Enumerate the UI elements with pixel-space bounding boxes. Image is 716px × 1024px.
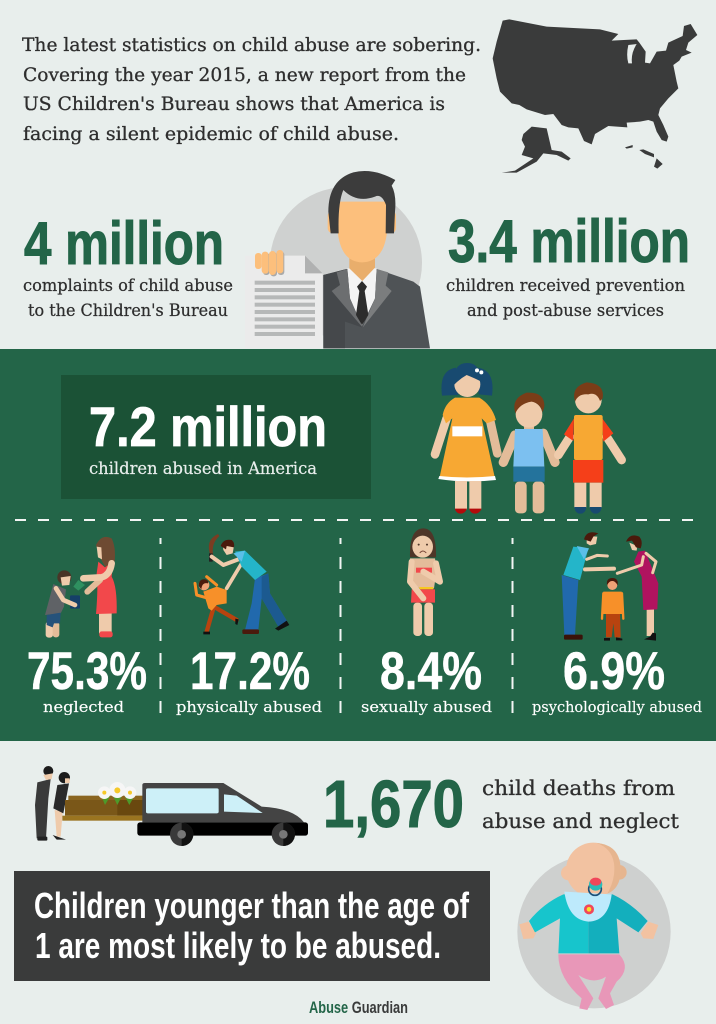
illustration: mourners, coffin and hearse [35,766,308,846]
panel: green statistics band [0,349,716,741]
stat: 1,670 child deaths [323,767,680,842]
illustration: psychologically abused child with arguing parents [562,532,658,641]
stat: 4 million: to the Children's Bureau [28,301,228,320]
stat: 4 million: 4 million [24,210,224,277]
stat: 1,670 child deaths: 1,670 [323,767,464,842]
stat: 4 million: complaints of child abuse [23,276,233,295]
intro text block: The latest statistics on child abuse are sobering. [22,35,481,56]
callout: 7.2 million children abused: 7.2 million [89,395,327,458]
stat: 17.2% physically abused: physically abused [176,700,322,716]
illustration: neglected child with mother [45,537,117,638]
stat: 17.2% physically abused: 17.2% [190,642,310,701]
intro text block [22,35,481,145]
stat: 8.4% sexually abused [361,642,492,716]
illustration: man holding a report [245,171,430,348]
stat: 3.4 million: children received prevention [446,276,685,295]
stat: 4 million [23,210,233,320]
stat: 75.3% neglected [27,642,147,716]
intro text block: US Children's Bureau shows that America is [23,94,445,115]
stat: 8.4% sexually abused: 8.4% [380,642,482,701]
illustration: baby with pacifier [517,843,671,1010]
stat: 1,670 child deaths: abuse and neglect [482,809,680,833]
callout: youngest children most at risk: Children younger than the age of [34,885,470,926]
stat: 75.3% neglected: neglected [43,700,124,716]
stat: 6.9% psychologically abused: 6.9% [563,642,665,701]
stat: 1,670 child deaths: child deaths from [482,776,675,800]
stat: 8.4% sexually abused: sexually abused [361,700,492,716]
callout: youngest children most at risk [14,871,490,981]
intro text block: facing a silent epidemic of child abuse. [23,124,399,145]
stat: 3.4 million: and post-abuse services [467,301,664,320]
callout: 7.2 million children abused: children abused in America [89,459,317,479]
stat: 6.9% psychologically abused: psychologically abused [532,700,702,716]
stat: 17.2% physically abused [176,642,322,716]
stat: 6.9% psychologically abused [532,642,702,716]
icon: US map [493,19,697,173]
footer logo: Abuse Guardian: Abuse Guardian [309,998,408,1017]
callout: 7.2 million children abused [61,375,371,499]
illustration: three children holding hands [435,363,622,514]
callout: youngest children most at risk: 1 are most likely to be abused. [35,925,441,966]
illustration: sexually abused girl [410,528,440,636]
intro text block: Covering the year 2015, a new report from the [23,65,466,86]
illustration: physically abused child with man and belt [195,534,289,634]
stat: 75.3% neglected: 75.3% [27,642,147,701]
stat: 3.4 million [446,208,690,320]
